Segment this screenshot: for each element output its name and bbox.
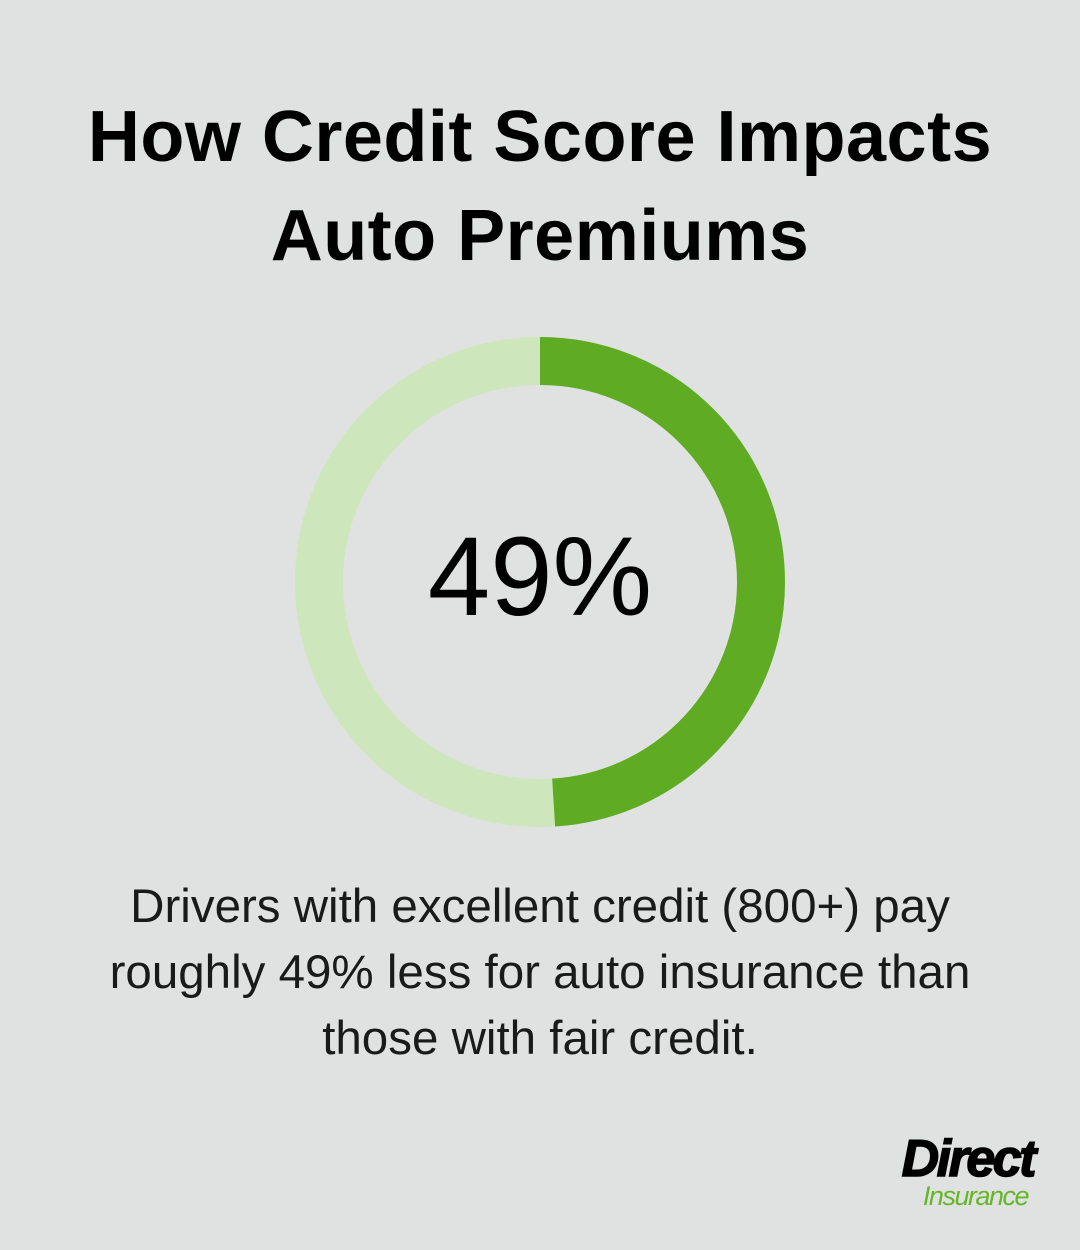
logo: Direct	[902, 1130, 1034, 1188]
description text: those with fair credit.	[322, 1012, 758, 1065]
description text: Drivers with excellent credit (800+) pay	[130, 880, 950, 933]
donut track	[319, 361, 761, 803]
description text: roughly 49% less for auto insurance than	[110, 946, 970, 999]
title: Auto Premiums	[271, 196, 809, 276]
center value: 49%	[428, 514, 652, 639]
logo: Insurance	[923, 1181, 1028, 1211]
donut value arc 49%	[319, 361, 761, 803]
description text	[110, 880, 970, 1065]
title: How Credit Score Impacts	[88, 97, 992, 177]
title	[88, 97, 992, 276]
logo	[902, 1130, 1040, 1211]
